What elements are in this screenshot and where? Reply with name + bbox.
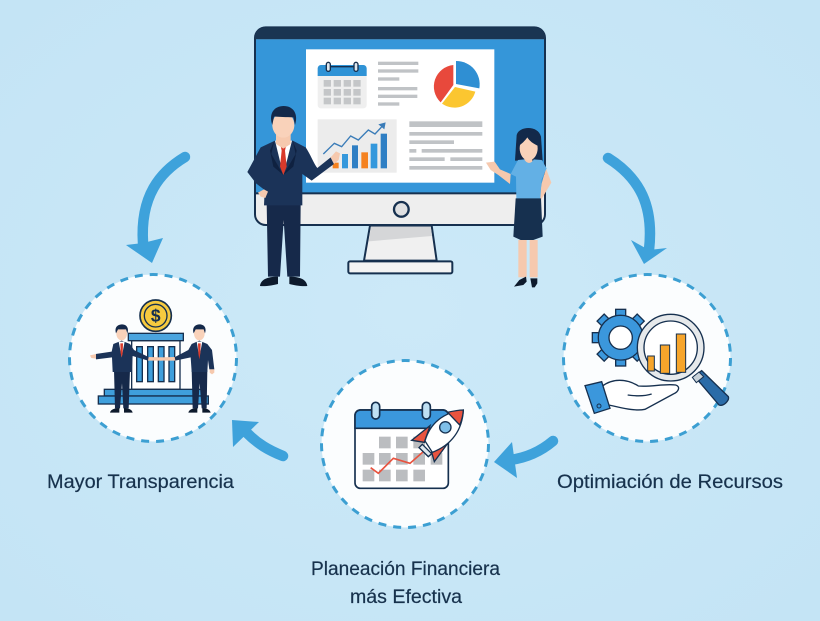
icon: bank with two businessmen and coin (90, 300, 214, 413)
dashboard panel (306, 49, 494, 183)
bar and line chart (318, 119, 397, 173)
magnifier (637, 314, 729, 405)
left businessman (90, 324, 162, 413)
right businessman (160, 324, 214, 413)
monitor stand (348, 226, 452, 273)
arrow: Optimiación to Planeación (494, 441, 553, 478)
rocket (412, 410, 463, 462)
hand (585, 380, 679, 413)
icon: calendar (318, 62, 367, 108)
label: Mayor Transparencia: Mayor Transparencia (47, 471, 234, 493)
label: Optimiación de Recursos: Optimiación de Recursos (557, 471, 783, 493)
calendar (355, 402, 448, 488)
arrow: Mayor Transparencia return (232, 420, 283, 456)
gear (592, 309, 649, 366)
label: Planeación Financiera más Efectiva: más Efectiva (350, 586, 462, 608)
arrow: monitor to Optimiación de Recursos (608, 158, 667, 264)
icon: bank with two businessmen and coin: $ (151, 306, 161, 326)
text lines beside calendar (378, 62, 418, 106)
arrow: monitor to Mayor Transparencia (126, 157, 185, 263)
pie chart (434, 61, 480, 108)
circle: Mayor Transparencia (70, 274, 236, 442)
text block (409, 121, 482, 170)
label: Planeación Financiera más Efectiva (311, 558, 500, 608)
monitor body (255, 27, 545, 225)
man presenter (247, 106, 340, 286)
icon: gear, magnifier and hand (585, 309, 729, 413)
woman presenter (486, 128, 551, 287)
circle: Planeación Financiera (322, 360, 488, 528)
central monitor scene (247, 27, 551, 287)
circle: Optimiación de Recursos (564, 274, 730, 442)
icon: calendar with rocket (355, 402, 463, 488)
label: Planeación Financiera más Efectiva: Planeación Financiera (311, 558, 500, 580)
